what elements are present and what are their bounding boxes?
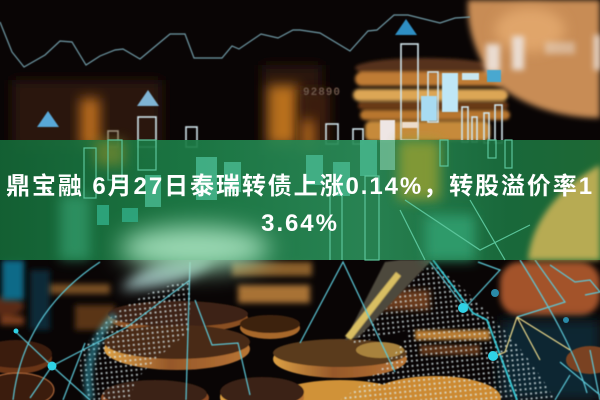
teal panel at lower right xyxy=(500,320,600,400)
blurred light bars on coin xyxy=(486,35,600,72)
dark teal column at left xyxy=(2,260,24,300)
faint ticker number: 92890 xyxy=(303,87,341,99)
filled candlesticks xyxy=(380,70,501,142)
coin highlights xyxy=(495,8,565,52)
blurred orange glows behind chart xyxy=(12,65,330,155)
globe node dots xyxy=(14,289,569,370)
big blurred coin, top right xyxy=(468,0,600,118)
globe wire lines xyxy=(13,260,600,400)
candlestick bars, top xyxy=(108,44,502,147)
blurred coin stack, centre right xyxy=(353,58,510,141)
title: 鼎宝融 6月27日泰瑞转债上涨0.14%，转股溢价率13.64% xyxy=(6,173,594,237)
lower blurred background coins xyxy=(0,262,600,330)
line chart xyxy=(0,15,470,67)
gold coins, lower xyxy=(0,301,600,400)
triangle markers xyxy=(37,19,417,127)
light teal glow below band xyxy=(120,257,215,290)
dotted globe xyxy=(80,262,555,400)
cyan arc on globe xyxy=(88,315,115,400)
green title band background xyxy=(0,140,600,270)
glass pen nib xyxy=(345,260,432,340)
